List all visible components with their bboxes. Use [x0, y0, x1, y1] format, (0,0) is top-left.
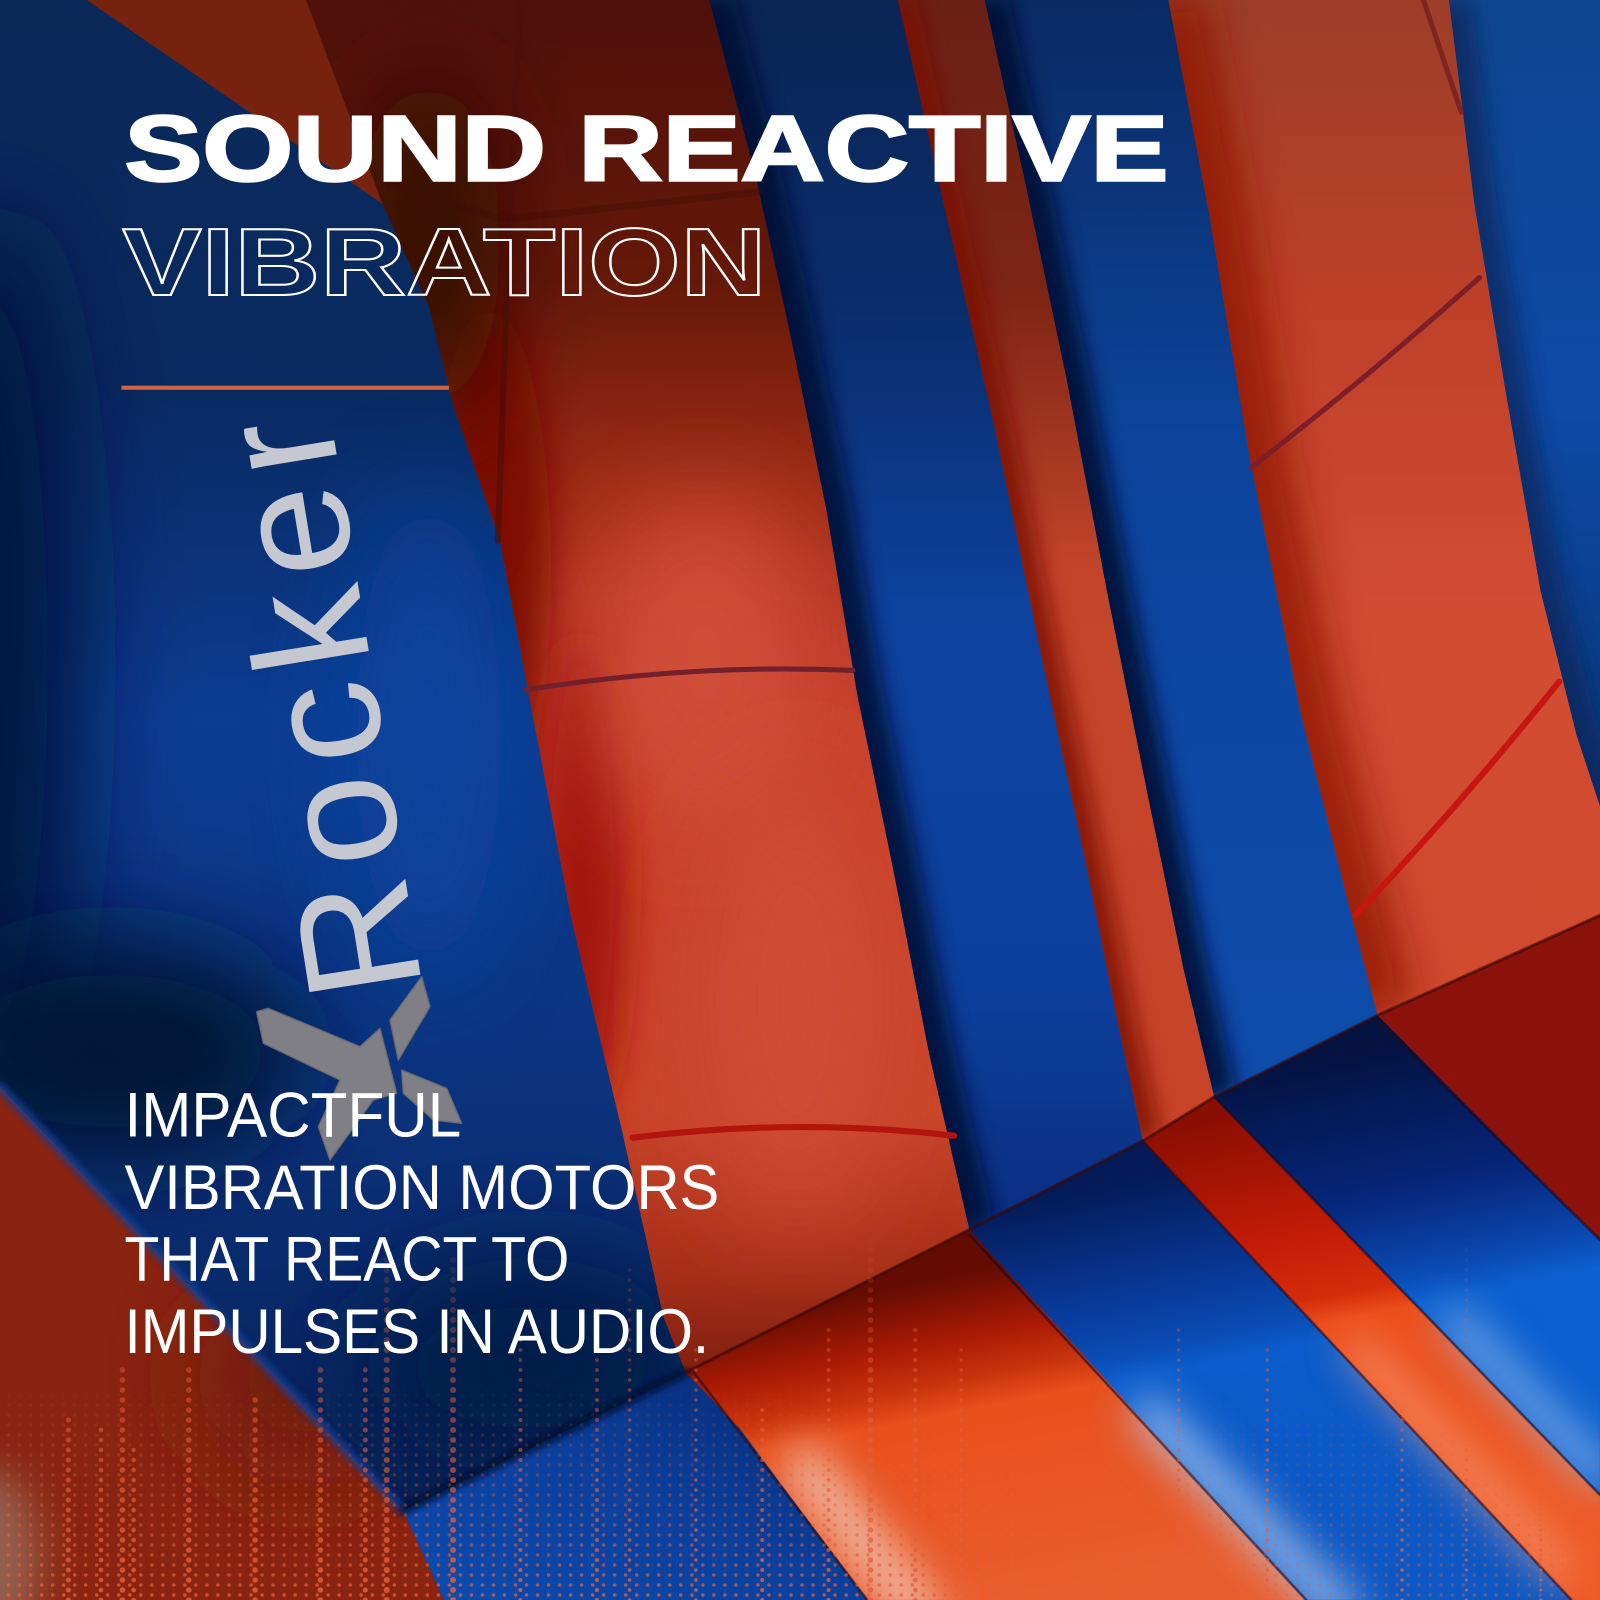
- panel: seat cushion segments: [686, 915, 1600, 1600]
- title: [122, 97, 1168, 316]
- panel: blue stripe six: [1444, 0, 1600, 816]
- line 2: VIBRATION MOTORS: [124, 1153, 719, 1223]
- tall dot columns: [68, 1200, 1541, 1600]
- panel: top-left red corner: [87, 0, 383, 204]
- line 3: THAT REACT TO: [124, 1225, 569, 1295]
- logo wordmark Rocker: [327, 393, 422, 988]
- cushion: red right: [1143, 1097, 1600, 1600]
- panel: red stripe three: [893, 0, 1219, 1143]
- cushion: blue centre: [969, 1141, 1571, 1600]
- cushion: blue right: [1214, 1015, 1600, 1495]
- fine dot grid: [6, 1394, 1598, 1597]
- cushion: dark red corner: [1378, 915, 1600, 1240]
- pale light highlights on cushion edges: [806, 1321, 1600, 1600]
- panel: blue base segment: [403, 1372, 867, 1600]
- heading: SOUND REACTIVE: SOUND REACTIVE: [124, 97, 1168, 201]
- line 1: IMPACTFUL: [124, 1081, 461, 1151]
- panel: left blue backrest with logo: [0, 0, 714, 1531]
- panel: large red centre-left: [296, 0, 990, 1388]
- panel: blue stripe two: [704, 0, 1153, 1235]
- body text: [124, 1081, 719, 1367]
- panel: blue stripe four: [980, 0, 1383, 1102]
- cushion: red left: [686, 1230, 1306, 1600]
- panel: lower-left red side bolster: [0, 1082, 449, 1600]
- icon: logo X mark: [257, 977, 462, 1160]
- panel: red stripe five: [1163, 0, 1600, 1020]
- embroidered XRocker logo: Rocker: [244, 426, 420, 992]
- heading outline: VIBRATION: VIBRATION: [122, 209, 766, 316]
- halftone sound wave dots: [0, 1200, 1600, 1600]
- orange divider rule: [121, 386, 449, 390]
- embroidered XRocker logo: [244, 426, 462, 1161]
- line 4: IMPULSES IN AUDIO.: [124, 1297, 709, 1367]
